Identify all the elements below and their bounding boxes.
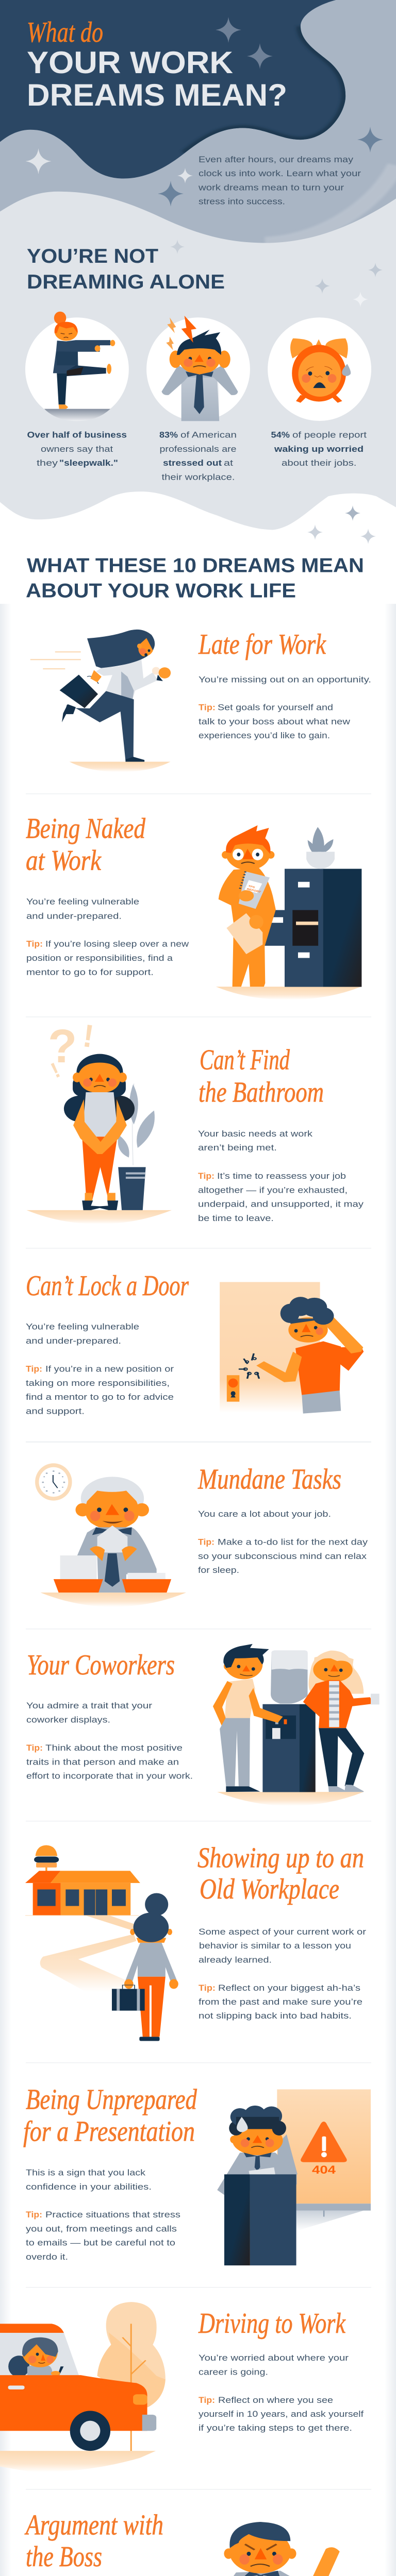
stat: waking up worried: about their jobs. (282, 459, 357, 468)
text: showing up to an old workplace: behavior is similar to a lesson you (199, 1941, 351, 1951)
text: your coworkers (26, 1701, 193, 1781)
text: being unprepared: This is a sign that you lack (26, 2168, 146, 2177)
text: your coworkers: traits in that person and make an (26, 1757, 179, 1767)
heading: you're not dreaming alone (27, 245, 225, 293)
text: mundane tasks: Tip: (198, 1537, 214, 1547)
text: being naked at work: Tip: (26, 940, 43, 949)
text: late for work: You’re missing out on an opportunity. (199, 675, 371, 684)
text: late for work: Set goals for yourself and (218, 703, 333, 713)
heading: can't find the bathroom: the Bathroom (199, 1077, 324, 1109)
icon: sleepwalker (25, 312, 129, 421)
heading: argument with the boss (24, 2510, 163, 2573)
stat: stressed out: at (224, 459, 234, 468)
stat: stressed out (159, 431, 237, 482)
text: can't find the bathroom (198, 1129, 364, 1223)
text: showing up to an old workplace: Some aspect of your current work or (199, 1927, 367, 1937)
heading: being naked at work (26, 813, 146, 877)
text: can't lock a door: You’re feeling vulnerable (26, 1322, 139, 1331)
stat: stressed out: stressed out (163, 459, 222, 468)
text: can't lock a door: and under-prepared. (26, 1336, 121, 1346)
panel: being unprepared for a presentation (23, 2084, 371, 2265)
heading: can't find the bathroom (199, 1044, 324, 1109)
stat: waking up worried: of people report (292, 431, 367, 440)
text: being unprepared: Tip: (26, 2210, 42, 2219)
text: can't lock a door: If you’re in a new position or (45, 1364, 174, 1374)
heading: can't lock a door: Can’t Lock a Door (26, 1270, 189, 1302)
text: can't find the bathroom: altogether — if you’re exhausted, (198, 1185, 348, 1195)
text: being naked at work: You’re feeling vulnerable (26, 897, 139, 907)
text: driving to work: if you’re taking steps to get there. (199, 2424, 352, 2433)
text: showing up to an old workplace: already learned. (199, 1955, 272, 1964)
text: can't lock a door (26, 1322, 174, 1416)
text: can't lock a door: and support. (26, 1406, 85, 1416)
text: being unprepared: to emails — but be careful not to (26, 2239, 175, 2248)
title: What do (27, 16, 103, 48)
text: mundane tasks: for sleep. (198, 1566, 239, 1575)
title: YOUR WORK (27, 45, 233, 80)
stat: stressed out: of American (180, 431, 237, 440)
icon: stressed professional (146, 316, 250, 421)
text: mundane tasks: Make a to-do list for the next day (218, 1537, 368, 1547)
text: late for work: Tip: (199, 703, 216, 713)
stat: waking up worried: 54% (271, 431, 290, 440)
text: can't find the bathroom: Tip: (198, 1172, 214, 1181)
text: your coworkers: Tip: (26, 1743, 43, 1753)
heading: argument with the boss: Argument with (24, 2510, 163, 2541)
text: your coworkers: Think about the most positive (45, 1743, 183, 1753)
stat: sleepwalk: Over half of business (27, 431, 127, 440)
icon: question and exclamation marks (47, 1018, 96, 1082)
panel: mundane tasks (35, 1463, 368, 1607)
text: driving to work: Tip: (199, 2396, 215, 2405)
heading: you're not dreaming alone: YOU’RE NOT (27, 245, 158, 267)
illustration: woman needing the bathroom (26, 1054, 172, 1224)
intro text: stress into success. (199, 197, 285, 206)
text: can't find the bathroom: aren’t being met. (198, 1143, 277, 1153)
panel: can't find the bathroom (26, 1018, 364, 1224)
text: can't lock a door: find a mentor to go to for advice (26, 1393, 174, 1402)
text: being unprepared: confidence in your abilities. (26, 2182, 152, 2192)
text: late for work: talk to your boss about what new (199, 717, 350, 726)
heading: being unprepared (23, 2084, 197, 2147)
title (27, 16, 287, 112)
heading: your coworkers: Your Coworkers (27, 1649, 175, 1681)
icon: question and exclamation marks: ? (48, 1020, 77, 1073)
panel: late for work (30, 629, 371, 772)
intro text (198, 155, 361, 206)
stat: stressed out: their workplace. (162, 473, 235, 482)
icon: question and exclamation marks: ! (47, 1058, 64, 1082)
label: 404: 404 (312, 2163, 336, 2176)
intro text: clock us into work. Learn what your (199, 169, 361, 178)
intro text: Even after hours, our dreams may (199, 155, 354, 164)
text: can't find the bathroom: underpaid, and unsupported, it may (198, 1199, 364, 1209)
illustration: coworkers at water cooler (213, 1644, 380, 1806)
illustration: man fumbling keys at door (220, 1282, 364, 1414)
heading: what these 10 dreams mean: ABOUT YOUR WORK LIFE (26, 580, 296, 602)
panel: driving to work (0, 2302, 364, 2472)
text: being naked at work (26, 897, 189, 977)
text: your coworkers: coworker displays. (26, 1716, 110, 1725)
text: can't lock a door: taking on more responsibilities, (26, 1379, 170, 1388)
title: DREAMS MEAN? (27, 78, 287, 112)
panel: statistics (25, 312, 371, 482)
stat: sleepwalk: owners say that (41, 445, 113, 454)
text: can't find the bathroom: It’s time to reassess your job (217, 1172, 346, 1181)
stat: sleepwalk (27, 431, 127, 468)
text: mundane tasks (198, 1510, 368, 1575)
text: can't lock a door: Tip: (26, 1364, 42, 1374)
stat: sleepwalk: "sleepwalk." (59, 459, 118, 468)
panel: showing up to an old workplace (25, 1842, 367, 2041)
heading: showing up to an old workplace: Showing up to an (197, 1842, 364, 1874)
illustration: woman walking to old burger job (25, 1845, 178, 2041)
text: being naked at work: and under-prepared. (26, 911, 122, 921)
intro text: work dreams mean to turn your (198, 183, 344, 193)
panel: your coworkers (26, 1644, 380, 1806)
stat: stressed out: professionals are (160, 445, 236, 454)
text: showing up to an old workplace: Tip: (199, 1984, 216, 1993)
decorative stars: header (26, 17, 383, 544)
heading: what these 10 dreams mean (26, 555, 364, 602)
heading: you're not dreaming alone: DREAMING ALONE (27, 271, 225, 293)
heading: mundane tasks: Mundane Tasks (197, 1463, 341, 1495)
illustration: arguing with boss (198, 2522, 384, 2576)
illustration: man and filing cabinet: TPS (248, 885, 255, 889)
text: mundane tasks: You care a lot about your job. (198, 1510, 331, 1519)
illustration: office worker with paper (35, 1463, 186, 1607)
illustration: man and filing cabinet (216, 825, 361, 1000)
text: showing up to an old workplace: Reflect on your biggest ah-ha’s (218, 1984, 360, 1993)
text: driving to work: career is going. (199, 2367, 268, 2377)
text: driving to work: Reflect on where you see (218, 2396, 333, 2405)
panel: being naked at work (26, 813, 361, 1000)
text: driving to work: yourself in 10 years, and ask yourself (199, 2410, 364, 2419)
text: being unprepared (26, 2168, 180, 2262)
text: showing up to an old workplace: not slipping back into bad habits. (199, 2011, 352, 2021)
illustration: man and filing cabinet: REPORT (246, 888, 261, 894)
text: driving to work (199, 2353, 364, 2433)
heading: being naked at work: at Work (26, 845, 102, 877)
stat: waking up worried (271, 431, 367, 468)
heading: argument with the boss: the Boss (26, 2541, 102, 2573)
heading: showing up to an old workplace: Old Workplace (200, 1873, 339, 1905)
heading: being unprepared: for a Presentation (23, 2115, 195, 2147)
text: mundane tasks: so your subconscious mind can relax (198, 1552, 367, 1561)
illustration: woman driving car (0, 2302, 166, 2472)
stat: sleepwalk: they (37, 459, 58, 468)
panel: argument with the boss (24, 2510, 384, 2576)
text: being unprepared: overdo it. (26, 2252, 68, 2262)
icon: worried alarm clock (268, 317, 371, 421)
heading: showing up to an old workplace (197, 1842, 364, 1905)
text: showing up to an old workplace (199, 1927, 367, 2021)
text: your coworkers: You admire a trait that your (26, 1701, 153, 1710)
stat: waking up worried: waking up worried (274, 445, 364, 454)
icon: question and exclamation marks: ! (80, 1018, 96, 1055)
heading: driving to work: Driving to Work (198, 2308, 346, 2340)
heading: being naked at work: Being Naked (26, 813, 146, 845)
text: late for work: experiences you’d like to gain. (199, 731, 330, 740)
text: being unprepared: Practice situations that stress (45, 2210, 180, 2219)
stat: stressed out: 83% (159, 431, 178, 440)
text: being unprepared: you out, from meetings and calls (26, 2225, 177, 2234)
text: being naked at work: position or responsibilities, find a (26, 954, 173, 963)
illustration: presenter with 404 slide (217, 2089, 371, 2265)
header panel: dark blob (0, 0, 345, 178)
heading: can't find the bathroom: Can’t Find (200, 1044, 290, 1076)
text: driving to work: You’re worried about where your (199, 2353, 349, 2363)
text: being naked at work: mentor to go to for support. (26, 968, 154, 977)
text: showing up to an old workplace: from the past and make sure you’re (199, 1997, 362, 2007)
text: your coworkers: effort to incorporate that in your work. (26, 1771, 193, 1781)
text: can't find the bathroom: be time to leave. (198, 1214, 274, 1223)
illustration: running woman (30, 630, 171, 772)
text: late for work (199, 675, 371, 740)
heading: being unprepared: Being Unprepared (26, 2084, 197, 2116)
text: being naked at work: If you’re losing sleep over a new (45, 940, 189, 949)
text: can't find the bathroom: Your basic needs at work (198, 1129, 313, 1139)
heading: late for work: Late for Work (198, 629, 326, 660)
heading: what these 10 dreams mean: WHAT THESE 10 DREAMS MEAN (27, 555, 364, 577)
panel: can't lock a door (26, 1270, 364, 1416)
